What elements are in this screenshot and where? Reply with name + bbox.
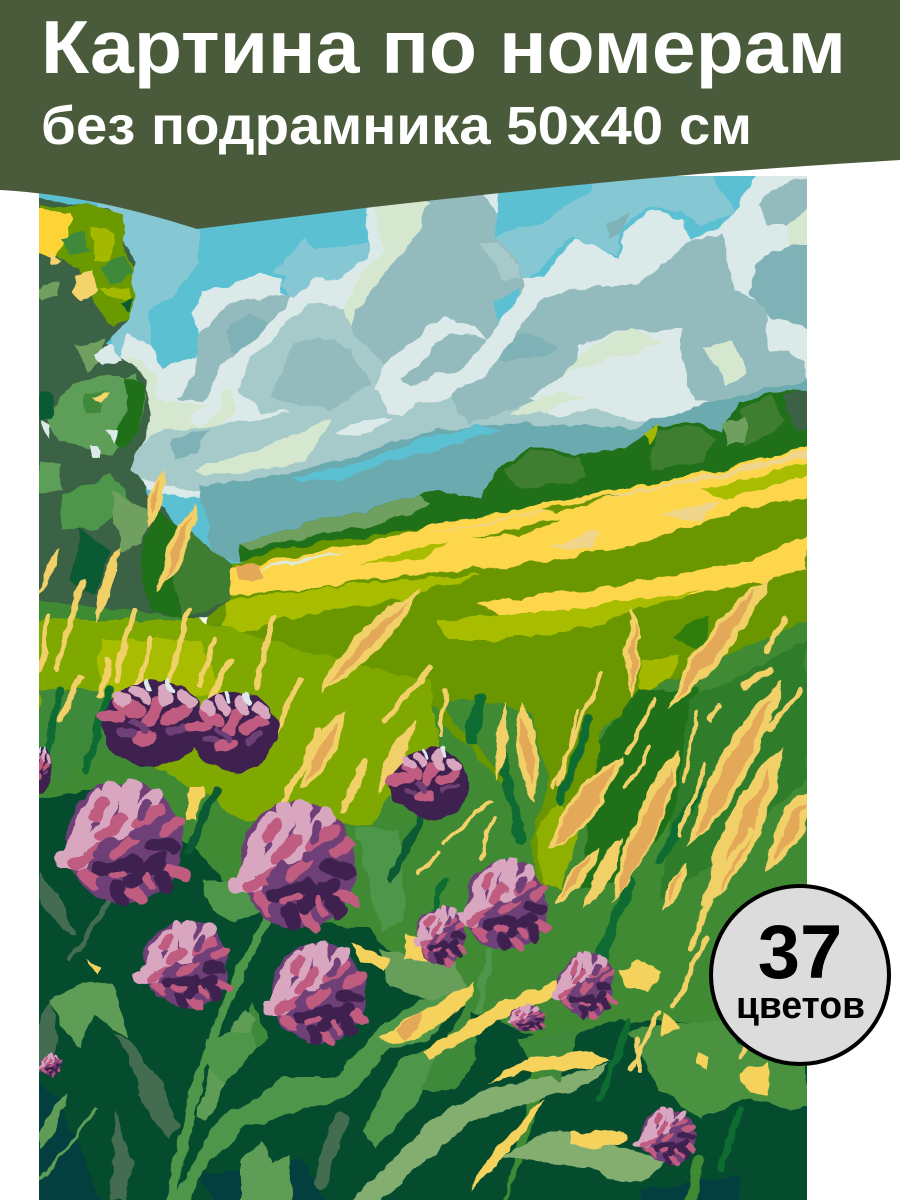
clover stems bbox=[40, 790, 700, 1200]
ochre blob on leaf bbox=[395, 1012, 420, 1042]
badge: colour count: 37 bbox=[758, 910, 842, 995]
golden field bbox=[206, 446, 807, 709]
sky bbox=[39, 176, 756, 564]
foreground meadow base bbox=[15, 600, 830, 1200]
badge: colour count bbox=[711, 886, 889, 1064]
distant hills bbox=[199, 375, 830, 560]
tree line bbox=[239, 388, 830, 560]
wheat spikes: pale yellow bodies bbox=[40, 468, 812, 910]
badge: colour count: цветов bbox=[736, 985, 865, 1027]
header banner bbox=[0, 0, 900, 229]
grass blades: green bbox=[45, 690, 770, 1170]
subtitle: без подрамника 50х40 см bbox=[41, 96, 752, 156]
wheat spikes: ochre centres bbox=[152, 480, 806, 902]
title: Картина по номерам bbox=[41, 5, 846, 89]
grass blades: thin pale strokes bbox=[40, 580, 800, 1070]
clover flowers bbox=[26, 680, 695, 1163]
painting: meadow landscape bbox=[15, 150, 830, 1200]
yellow leaf highlights bbox=[85, 785, 770, 1190]
left tree bbox=[39, 198, 232, 618]
leaves bbox=[39, 870, 663, 1200]
clouds bbox=[100, 165, 830, 500]
